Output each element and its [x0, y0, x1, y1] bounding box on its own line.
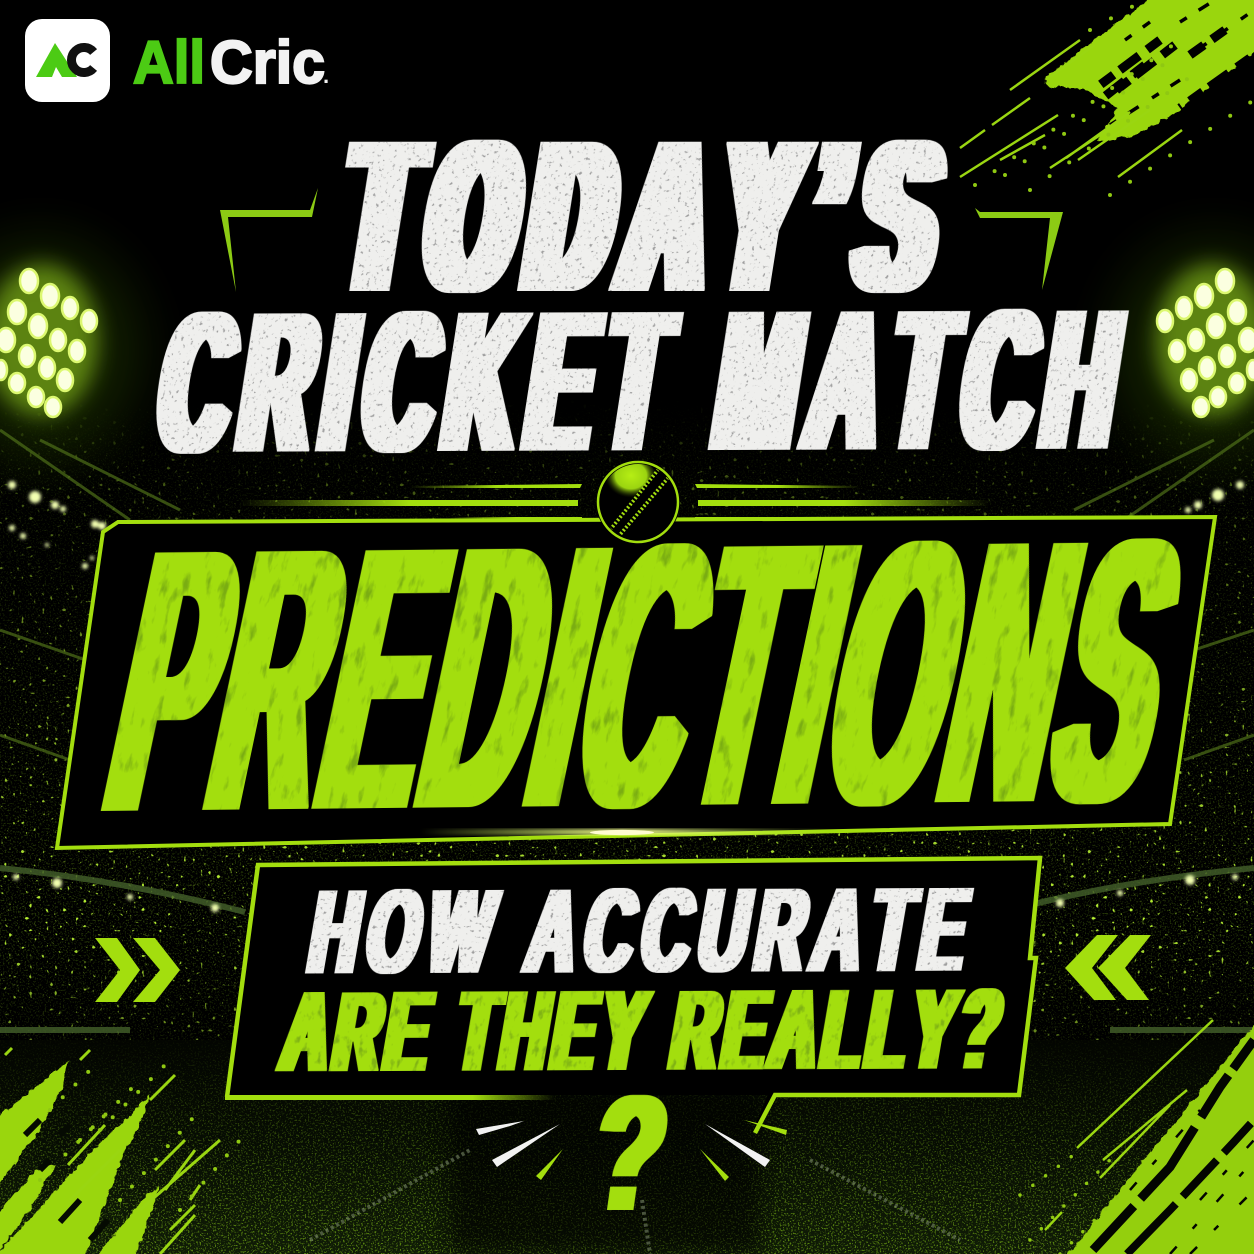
heading: Today's: TODAY’S: [330, 97, 972, 336]
logo wordmark: All: [133, 29, 205, 96]
bracket left of headline: [220, 188, 318, 292]
rays around question mark: [476, 1120, 787, 1181]
icon: cricket ball: [596, 460, 680, 544]
green brush streaks: bottom left: [0, 1048, 240, 1254]
heading: Cricket Match: CRICKET MATCH: [146, 269, 1147, 494]
chevrons right: [1065, 935, 1151, 1000]
question mark: ?: [584, 1063, 677, 1244]
subheading: How accurate: HOW ACCURATE: [301, 863, 987, 999]
divider lines beside ball: [240, 484, 990, 520]
green brush streaks: bottom right: [1020, 1020, 1254, 1254]
floodlight left: [0, 264, 98, 417]
logo wordmark: Cric: [210, 29, 325, 96]
panel: question: [225, 858, 1040, 1133]
bracket right of headline: [975, 208, 1063, 290]
panel: predictions: [57, 517, 1215, 848]
chevrons left: [95, 938, 180, 1002]
floodlight right: [1156, 264, 1254, 417]
logo badge: [25, 19, 110, 102]
subheading: Are they really: ARE THEY REALLY?: [274, 965, 1016, 1095]
heading: Predictions: PREDICTIONS: [83, 462, 1215, 889]
logo wordmark: .: [323, 63, 329, 88]
green brush streaks: top right: [960, 0, 1254, 195]
